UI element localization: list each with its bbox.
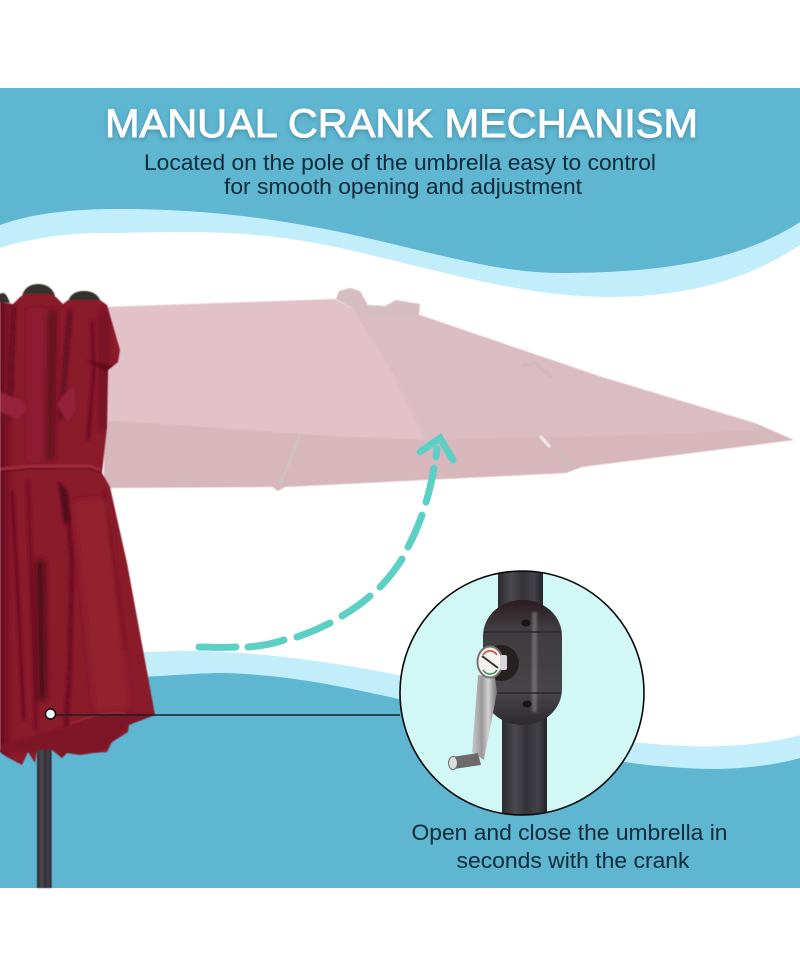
collar: [494, 645, 519, 681]
canopy left panel: [104, 299, 425, 440]
tucked folds: [0, 392, 27, 420]
housing: [483, 600, 562, 725]
caption: [412, 820, 728, 873]
leader line: [50, 714, 400, 716]
umbrella pole: [37, 745, 52, 888]
narrow dark folds: [10, 305, 125, 730]
detail circle: crank close-up: [400, 565, 644, 820]
top wave: blue header panel: [0, 88, 800, 297]
crank arm: [472, 675, 497, 760]
bottom wave: blue footer panel: [0, 651, 800, 888]
canopy right panel: [350, 305, 760, 440]
crank grip: [455, 753, 481, 769]
lower pole: [502, 715, 547, 820]
dashed teal arrow: [199, 438, 453, 647]
folded burgundy umbrella: [0, 280, 160, 888]
fabric body: [0, 280, 160, 770]
gauge disc: [478, 646, 502, 678]
ghosted open umbrella canopy: [104, 288, 794, 491]
hem shadow: [0, 714, 155, 758]
canopy ribs: [280, 363, 775, 484]
canopy vent knob: [336, 288, 420, 316]
upper pole: [498, 572, 543, 608]
leader dot: [46, 709, 56, 719]
broad soft shading: [0, 300, 112, 760]
arrow head: [420, 438, 453, 460]
heading: MANUAL CRANK MECHANISM: [105, 102, 698, 146]
subheading: [144, 150, 656, 199]
tie band: [0, 466, 101, 470]
caption: seconds with the crank: [456, 848, 691, 873]
top caps: [0, 284, 101, 303]
subheading: for smooth opening and adjustment: [224, 174, 582, 199]
subheading: Located on the pole of the umbrella easy to control: [144, 150, 656, 175]
canopy underside: [104, 420, 794, 491]
caption: Open and close the umbrella in: [412, 820, 728, 845]
